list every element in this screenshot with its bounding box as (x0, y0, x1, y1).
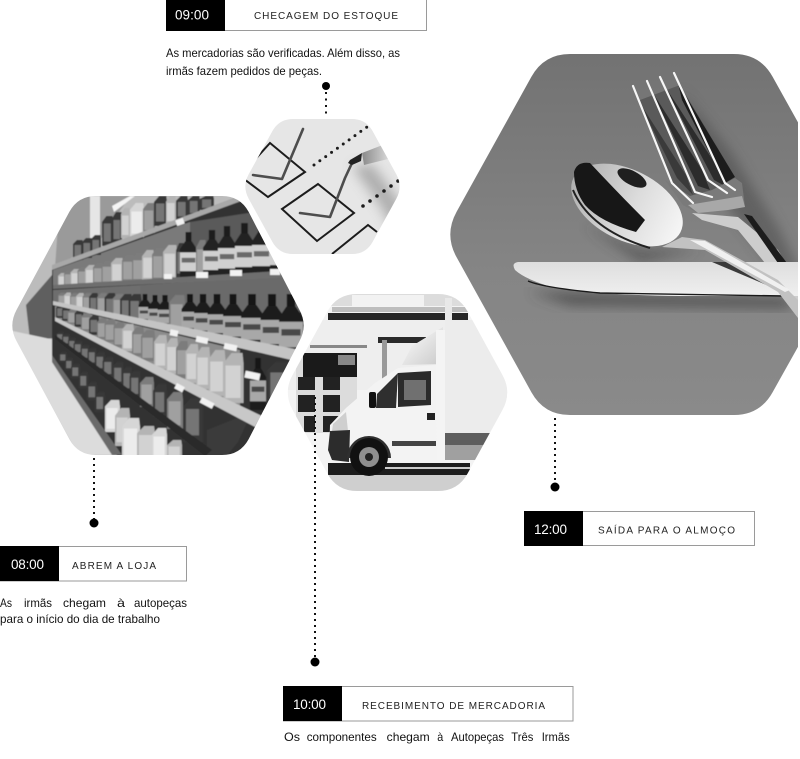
text: open store description: chegam (63, 596, 106, 610)
check marks (253, 129, 352, 217)
dotted connector: open store (90, 458, 98, 528)
text: goods receiving description: Irmãs (542, 730, 570, 744)
text: open store description: à (117, 596, 125, 610)
text: stock check description: As mercadorias são verificadas. Além disso, as (166, 46, 400, 60)
truck wheel (347, 436, 391, 476)
shop door (296, 353, 357, 433)
photo panel: checklist with pen (246, 119, 400, 254)
time label: 09:00 stock check (166, 0, 426, 31)
spoon (571, 162, 798, 318)
pen (348, 146, 388, 165)
text: open store description (0, 596, 187, 626)
text: goods receiving description: chegam (387, 730, 430, 744)
time label: 08:00 open store: ABREM A LOJA (72, 561, 156, 572)
checklist boxes (240, 143, 377, 254)
time label: 10:00 goods receiving (283, 686, 573, 721)
text: goods receiving description: componentes (307, 730, 377, 744)
text: goods receiving description: à (437, 730, 444, 744)
dotted connector: goods receiving (310, 397, 320, 666)
text: stock check description (166, 46, 400, 78)
truck box (402, 298, 490, 460)
photo panel: shelves of motor oil (12, 196, 304, 455)
time label: 09:00 stock check: 09:00 (175, 8, 209, 22)
text: goods receiving description: Três (511, 730, 533, 744)
dotted connector: stock check (322, 82, 330, 118)
time label: 12:00 lunch: SAÍDA PARA O ALMOÇO (598, 524, 735, 536)
text: goods receiving description: Os (284, 730, 300, 744)
dotted lines (314, 127, 398, 206)
knife (514, 262, 800, 296)
text: open store description: para o início do dia de trabalho (0, 612, 160, 626)
truck cab (328, 365, 437, 462)
fork (633, 73, 798, 317)
time label: 10:00 goods receiving: RECEBIMENTO DE MERCADORIA (362, 701, 545, 712)
time label: 08:00 open store (0, 546, 186, 581)
text: goods receiving description: Autopeças (451, 730, 504, 744)
photo panel: cutlery (440, 50, 800, 420)
text: stock check description: irmãs fazem pedidos de peças. (166, 64, 322, 78)
text: goods receiving description (284, 730, 570, 744)
road (328, 463, 470, 491)
time label: 08:00 open store: 08:00 (11, 557, 44, 572)
text: open store description: As (0, 596, 12, 610)
dotted connector: lunch (550, 418, 560, 492)
time label: 12:00 lunch: 12:00 (534, 522, 567, 537)
text: open store description: irmãs (24, 596, 52, 610)
text: open store description: autopeças (134, 596, 187, 610)
time label: 12:00 lunch (524, 511, 754, 546)
photo panel: delivery truck (288, 294, 508, 491)
time label: 09:00 stock check: CHECAGEM DO ESTOQUE (254, 11, 398, 22)
time label: 10:00 goods receiving: 10:00 (293, 697, 326, 712)
